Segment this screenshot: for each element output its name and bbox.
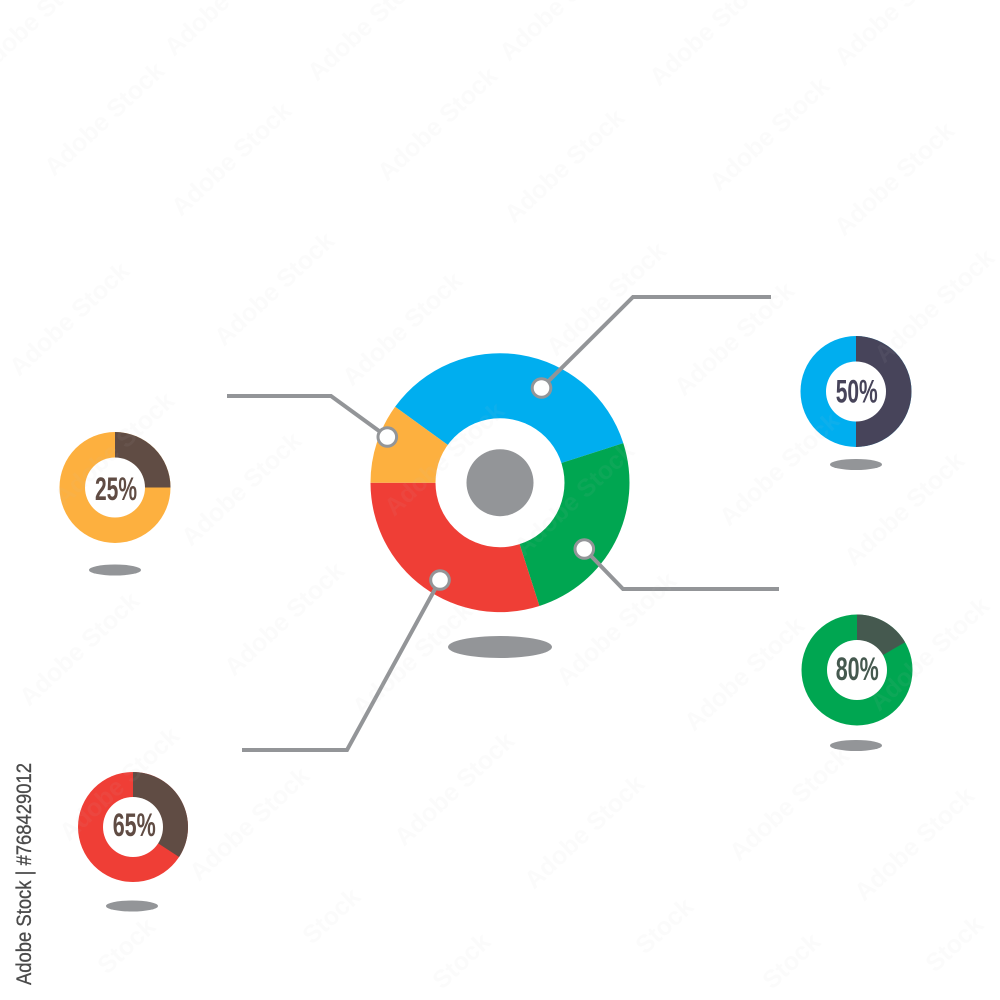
watermark pattern: Adobe Stock — [14, 587, 145, 711]
segment: red — [370, 483, 539, 612]
watermark pattern: Adobe Stock — [839, 447, 970, 571]
segment: orange — [370, 407, 500, 483]
connector: orange segment to left — [227, 396, 397, 446]
mini donut: 50% — [800, 336, 912, 470]
watermark pattern: Adobe Stock — [54, 722, 185, 846]
connector: blue segment to top right — [532, 297, 771, 397]
watermark pattern: Adobe Stock — [372, 62, 503, 186]
side stock credit: Adobe Stock | #768429012 — [13, 763, 36, 985]
watermark pattern: Stock — [630, 893, 699, 960]
watermark pattern: Adobe Stock — [4, 257, 135, 381]
segment: blue — [395, 353, 623, 483]
watermark pattern: Adobe Stock — [679, 612, 810, 736]
watermark pattern: Adobe Stock — [864, 592, 995, 716]
watermark pattern: Adobe Stock — [714, 407, 845, 531]
segment: green — [500, 443, 629, 606]
watermark pattern: Adobe Stock — [176, 427, 307, 551]
watermark pattern: Adobe Stock — [829, 117, 960, 241]
watermark pattern: Adobe Stock — [219, 557, 350, 681]
connector: green segment to right — [575, 540, 779, 589]
connector: red segment to lower left — [242, 571, 449, 750]
watermark pattern: Stock — [427, 928, 496, 995]
watermark pattern: Adobe Stock — [389, 727, 520, 851]
mini donut: 50%: 50% — [836, 374, 878, 410]
mini donut: 80% — [802, 614, 912, 751]
mini donut: 80%: 80% — [836, 651, 879, 687]
mini donut: 65%: 65% — [113, 807, 156, 843]
watermark pattern: Adobe Stock — [519, 770, 650, 894]
watermark pattern: Adobe Stock — [184, 762, 315, 886]
mini donut: 25%: 25% — [95, 471, 137, 507]
watermark pattern: Adobe Stock — [551, 567, 682, 691]
watermark pattern: Stock — [920, 911, 989, 978]
mini donut: 25% — [60, 432, 170, 576]
main donut chart — [370, 353, 629, 658]
centre grey disc — [466, 449, 534, 516]
watermark pattern: Adobe Stock — [347, 597, 478, 721]
watermark pattern: Adobe Stock — [209, 227, 340, 351]
watermark pattern: Stock — [92, 913, 161, 980]
watermark pattern: Adobe Stock — [499, 104, 630, 228]
watermark pattern: Adobe Stock — [669, 277, 800, 401]
watermark pattern: Adobe Stock — [704, 72, 835, 196]
watermark pattern: Adobe Stock — [166, 97, 297, 221]
watermark pattern: Adobe Stock — [39, 57, 170, 181]
donut hole — [436, 418, 564, 547]
shadow: main donut — [448, 636, 552, 658]
watermark pattern: Stock — [297, 883, 366, 950]
watermark pattern: Adobe Stock — [541, 237, 672, 361]
watermark pattern: Adobe Stock — [49, 387, 180, 511]
watermark pattern: Adobe Stock — [509, 437, 640, 561]
mini donut: 65% — [78, 772, 188, 912]
watermark pattern: Adobe Stock — [379, 397, 510, 521]
watermark pattern: Adobe Stock — [869, 244, 1000, 368]
watermark pattern: Adobe Stock — [337, 267, 468, 391]
watermark pattern: Adobe Stock — [724, 742, 855, 866]
watermark pattern: Stock — [757, 928, 826, 995]
watermark pattern: Adobe Stock — [849, 782, 980, 906]
